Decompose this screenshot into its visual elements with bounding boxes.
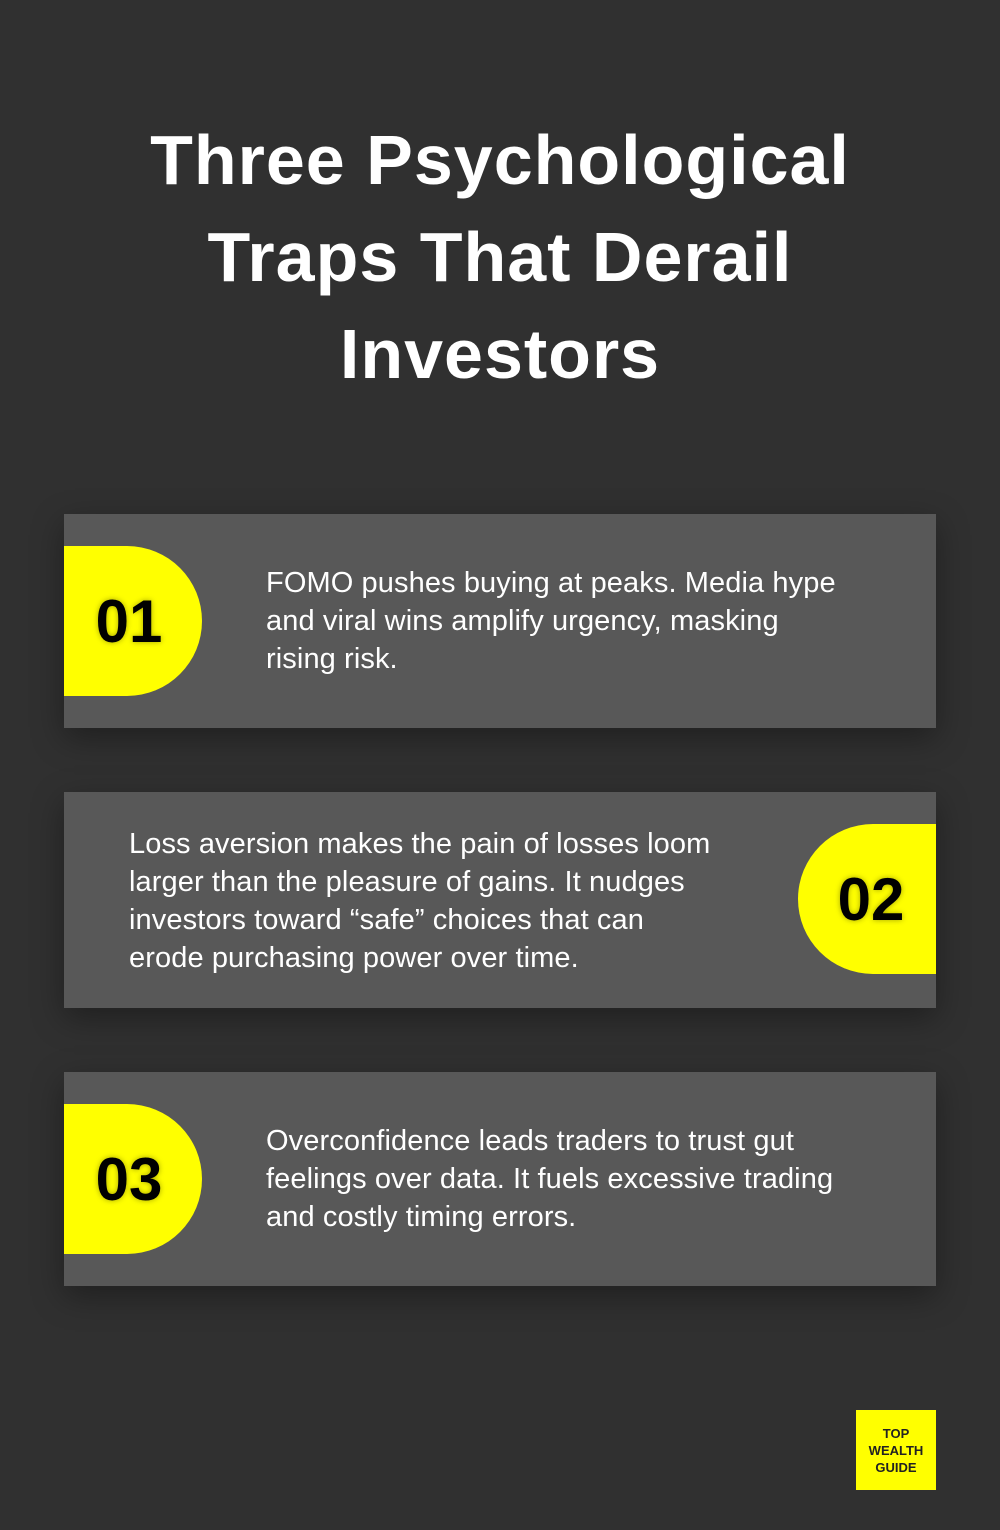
title: [150, 121, 850, 393]
panel: trap 03: [64, 1072, 936, 1286]
panel: trap 01: [64, 514, 936, 728]
text: loss aversion: investors toward “safe” choices that can: [129, 904, 644, 936]
logo: TOP: [883, 1426, 909, 1441]
text: loss aversion: [129, 828, 710, 974]
text: overconfidence: feelings over data. It fuels excessive trading: [266, 1163, 833, 1195]
title: Traps That Derail: [208, 218, 792, 296]
text: overconfidence: and costly timing errors.: [266, 1201, 576, 1233]
logo: [856, 1410, 936, 1490]
title: Three Psychological: [150, 121, 850, 199]
badge: 02: 02: [838, 866, 904, 932]
logo: GUIDE: [875, 1460, 917, 1475]
text: FOMO: rising risk.: [266, 643, 398, 675]
text: FOMO: [266, 567, 836, 675]
text: FOMO: FOMO pushes buying at peaks. Media hype: [266, 567, 836, 599]
badge: 01: 01: [96, 588, 162, 654]
badge: 03: [64, 1104, 202, 1254]
text: loss aversion: larger than the pleasure of gains. It nudges: [129, 866, 685, 898]
badge: 03: 03: [96, 1146, 162, 1212]
badge: 02: [798, 824, 936, 974]
panel: trap 02: [64, 792, 936, 1008]
text: loss aversion: Loss aversion makes the pain of losses loom: [129, 828, 710, 860]
logo: WEALTH: [869, 1443, 923, 1458]
badge: 01: [64, 546, 202, 696]
text: overconfidence: [266, 1125, 833, 1233]
text: loss aversion: erode purchasing power over time.: [129, 942, 579, 974]
text: overconfidence: Overconfidence leads traders to trust gut: [266, 1125, 794, 1157]
text: FOMO: and viral wins amplify urgency, masking: [266, 605, 779, 637]
title: Investors: [340, 315, 660, 393]
